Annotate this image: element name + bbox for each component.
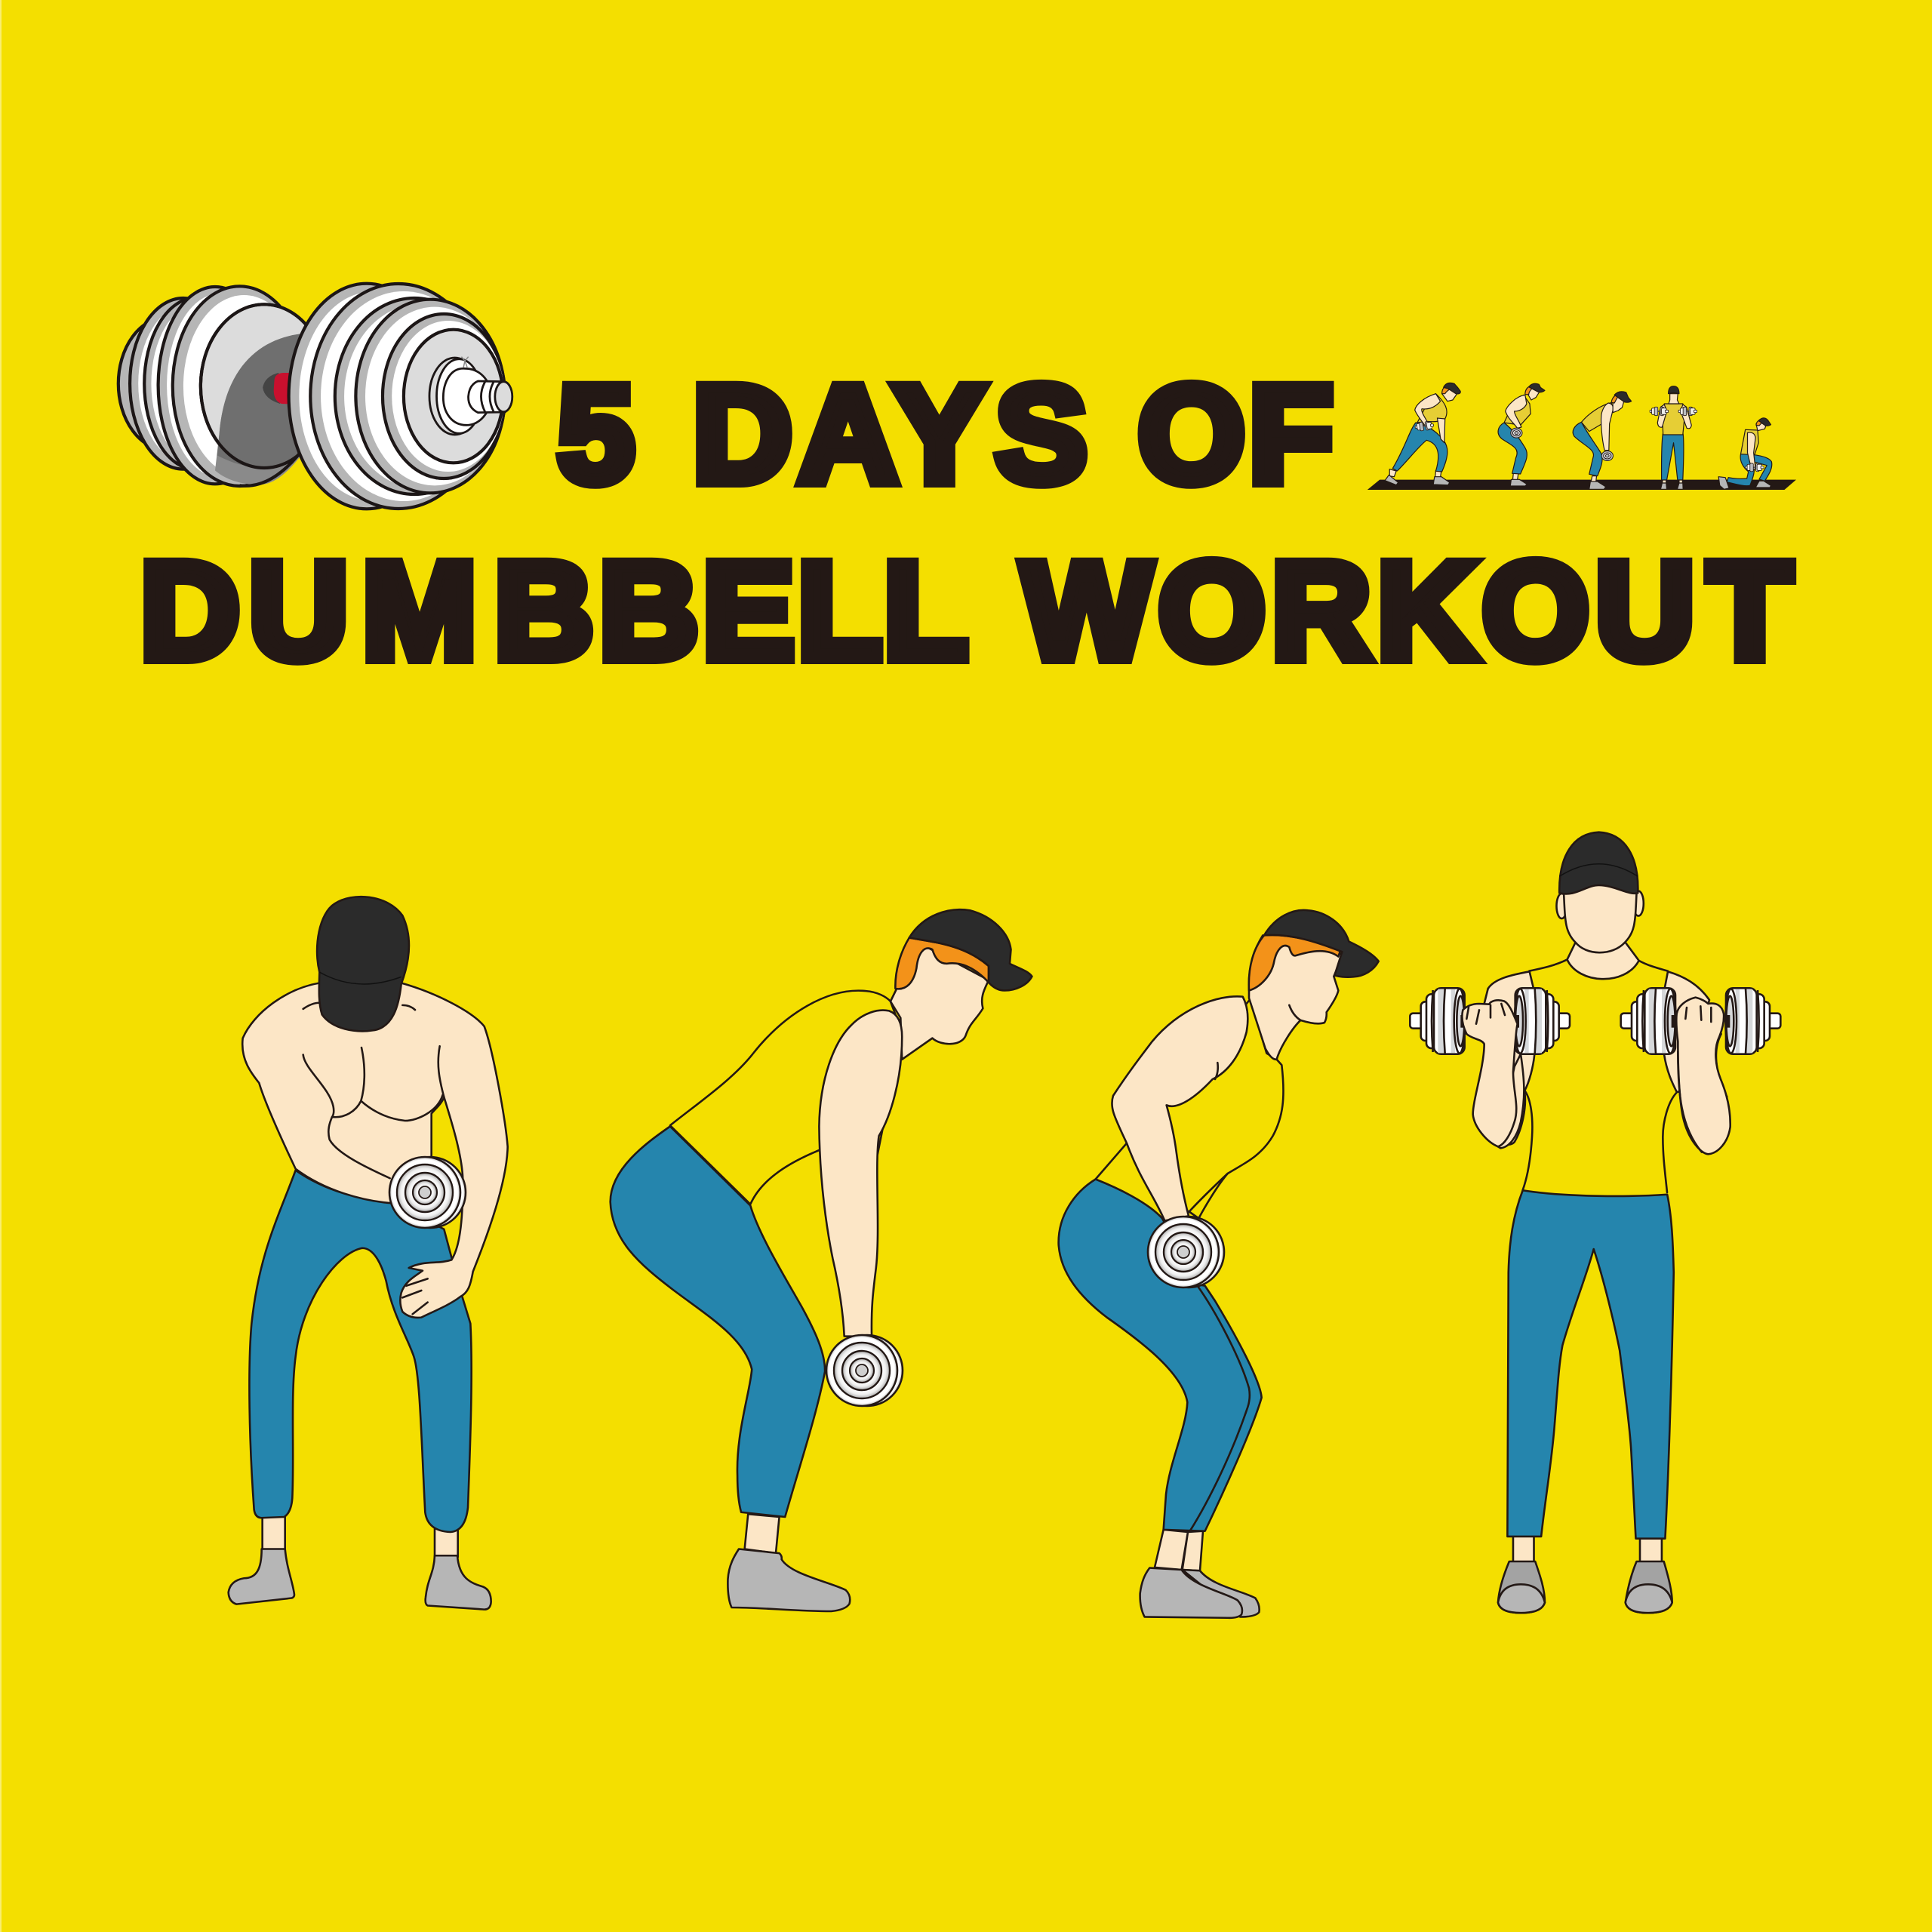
title line 2: DUMBBELL WORKOUT	[140, 534, 1792, 688]
title: 5 days of dumbbell workout	[140, 357, 1792, 688]
shoes	[1498, 1561, 1672, 1613]
shirt outline	[1096, 999, 1284, 1221]
hanging arm	[819, 1011, 902, 1337]
left upper arm	[1484, 971, 1534, 1145]
handle collar	[263, 373, 294, 405]
ankles	[1513, 1535, 1662, 1564]
trousers	[1507, 1190, 1674, 1539]
mini pose 1: lunge row	[1385, 383, 1460, 485]
hub and threaded shaft	[429, 357, 512, 435]
shoulder lines	[1529, 959, 1668, 971]
dumbbell: figure 2	[826, 1335, 903, 1406]
cap	[1559, 832, 1638, 894]
mini pose 5: kneeling lunge	[1718, 418, 1772, 489]
baseball cap	[1264, 910, 1379, 977]
shoes	[229, 1549, 491, 1610]
shoe	[728, 1549, 850, 1611]
mini illustration: five exercise poses on a mat	[1367, 383, 1796, 490]
dumbbell: figure 3	[1148, 1217, 1224, 1287]
arms and dumbbells	[1410, 971, 1780, 1192]
right forearm and fist	[1706, 1034, 1727, 1117]
trousers	[611, 1126, 825, 1517]
baseball cap	[909, 909, 1032, 990]
cap seen from above	[317, 897, 409, 1031]
trousers	[249, 1171, 472, 1532]
left forearm and fist	[1498, 1054, 1524, 1148]
face	[1564, 878, 1637, 952]
black mat	[1367, 480, 1796, 490]
left dumbbell	[1410, 988, 1570, 1054]
torso and arms	[242, 983, 508, 1318]
shins	[1155, 1530, 1203, 1571]
shirt outline	[670, 991, 902, 1204]
hair	[1249, 935, 1341, 990]
figure 2: bent-over deadlift, side view	[611, 909, 1032, 1611]
lower body and head	[1498, 832, 1674, 1613]
near weight plates	[289, 284, 505, 509]
mini pose 4: standing curl	[1650, 386, 1697, 489]
shoes	[1183, 1570, 1260, 1617]
title line 1: 5 DAYS OF	[558, 357, 1333, 511]
shin	[745, 1514, 780, 1553]
right upper arm	[1664, 971, 1709, 1092]
right dumbbell	[1621, 988, 1780, 1054]
neck	[1567, 943, 1639, 979]
figure 3: squat row, side view	[1059, 910, 1379, 1618]
dumbbell: figure 1	[389, 1157, 466, 1228]
chest and forearm contour lines	[303, 1003, 444, 1314]
head and neck	[1249, 935, 1342, 1060]
shoulder and arm	[1112, 996, 1247, 1221]
mini pose 3: bent-over row	[1573, 392, 1632, 489]
torso side lines	[1523, 1091, 1677, 1192]
ears	[1556, 894, 1567, 918]
head and neck	[891, 937, 989, 1060]
trousers	[1059, 1179, 1262, 1531]
figure 1: front view, single-arm curl	[229, 897, 508, 1610]
icon: large dumbbell	[118, 284, 512, 509]
mini pose 2: hip hinge	[1498, 383, 1545, 486]
far weight plates	[118, 286, 328, 486]
figure 4: standing biceps curl, front view	[1410, 832, 1780, 1613]
hair	[895, 937, 989, 989]
ankles	[263, 1516, 458, 1557]
